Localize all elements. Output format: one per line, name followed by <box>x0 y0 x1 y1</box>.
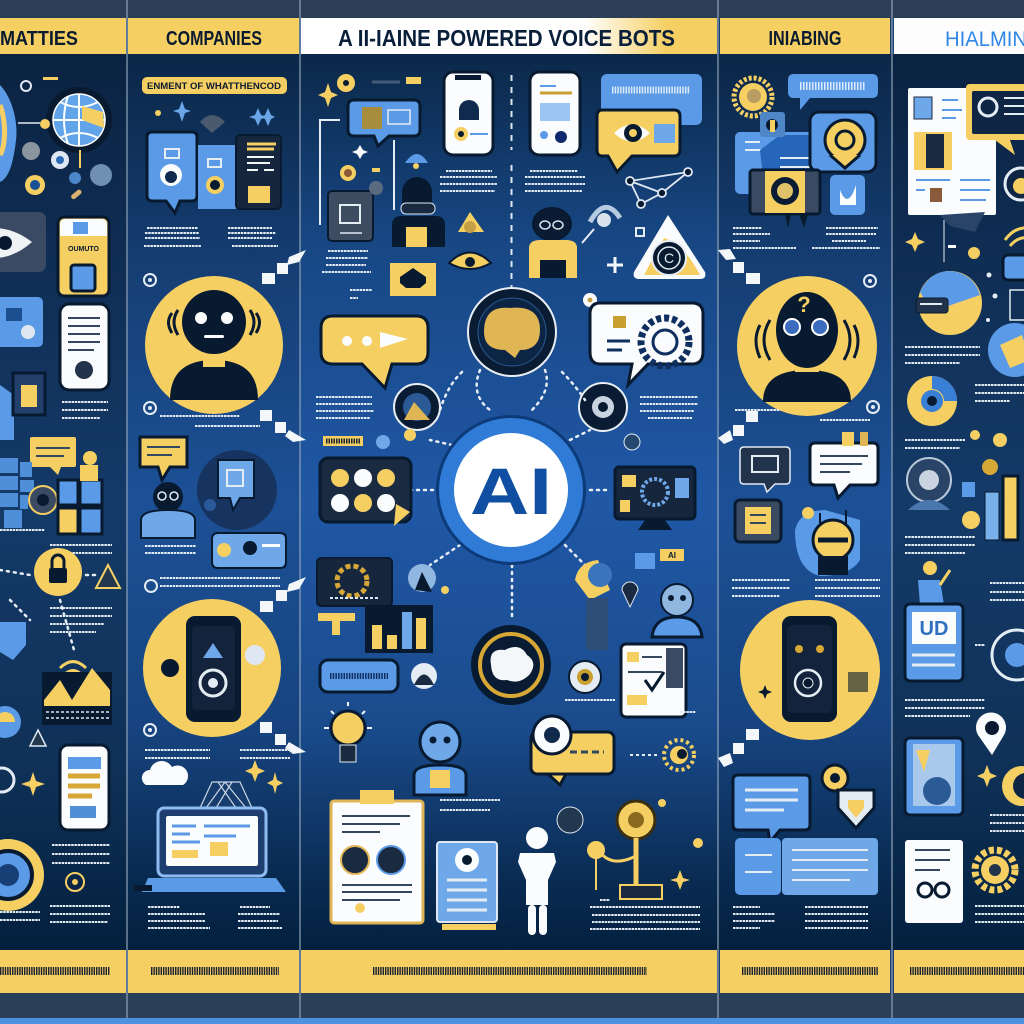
card: dark <box>328 181 383 241</box>
header: inviting <box>720 18 890 54</box>
robot: blue center <box>414 722 466 795</box>
top band <box>0 0 1024 18</box>
cluster: right upper: AI <box>668 551 676 560</box>
connector steps <box>718 411 758 444</box>
text block <box>145 750 290 758</box>
dotted radial links <box>405 370 610 620</box>
connector steps <box>260 410 306 442</box>
label pill <box>142 77 287 94</box>
icon: ring <box>145 580 157 592</box>
small icons cluster <box>18 77 112 200</box>
connector steps <box>260 722 306 754</box>
pill: blue label <box>320 660 398 692</box>
card: blue bubble <box>147 132 197 213</box>
clipboard <box>331 790 423 923</box>
core badge <box>471 625 551 705</box>
globe partial <box>988 323 1024 377</box>
text blocks <box>440 700 700 929</box>
icon: wifi speaker <box>1003 228 1024 280</box>
panel: chat blue <box>0 297 43 347</box>
panel: dark screen <box>615 434 695 530</box>
text blocks <box>733 228 880 248</box>
center column illustrations <box>316 72 705 935</box>
sparkle <box>21 772 45 796</box>
icon: sun gear <box>734 78 772 116</box>
icon: phone <box>444 72 493 155</box>
card: dark list <box>236 135 281 209</box>
icon: ring <box>1002 766 1024 806</box>
header: companies: COMPANIES <box>166 28 262 50</box>
document <box>908 88 996 215</box>
bottom dark band <box>0 993 1024 1019</box>
icon: bell <box>458 212 484 233</box>
phone badge <box>143 599 281 737</box>
chat pill <box>212 533 286 568</box>
header: companies <box>128 18 299 54</box>
icon: coin and pin <box>822 765 874 828</box>
icon: eye <box>449 252 491 269</box>
text blocks <box>440 171 585 191</box>
text block <box>990 815 1024 831</box>
cluster: right upper <box>575 549 684 650</box>
bubble: yellow location <box>531 716 614 785</box>
icon: wifi <box>60 662 86 674</box>
AI hub <box>436 415 586 565</box>
bracket <box>320 120 394 225</box>
icon: globe <box>46 87 112 153</box>
robot badge question <box>737 276 877 416</box>
icon: phone <box>530 72 580 155</box>
icon: plus <box>607 257 623 273</box>
icon: sun <box>630 740 694 770</box>
sparkles and coin <box>318 74 421 107</box>
icon: triangle badge <box>634 215 705 279</box>
card: speaker <box>750 170 820 228</box>
connector steps upper <box>262 250 306 284</box>
bubble: blue large <box>601 74 702 125</box>
panel: blue ring <box>810 112 876 172</box>
icon: shield <box>0 622 26 660</box>
column 1 illustrations <box>0 77 120 922</box>
text block <box>62 402 108 418</box>
robot ring <box>907 458 951 510</box>
text block <box>0 530 112 553</box>
chart: pie <box>916 271 982 335</box>
bubble: blue label <box>788 74 878 110</box>
icon: ring <box>569 661 601 693</box>
sparkles <box>245 760 283 794</box>
icon: gear <box>975 850 1015 890</box>
sparkles and wifi <box>155 101 275 133</box>
icon: ring <box>66 873 84 891</box>
icon: ring <box>867 401 879 413</box>
icon: ring <box>144 402 156 414</box>
icon: ring <box>1005 168 1024 200</box>
icon: phone <box>60 745 109 830</box>
card: blue: UD <box>920 618 948 640</box>
bubble: yellow <box>140 437 187 480</box>
header: main title: A II-IAINE POWERED VOICE BOTS <box>338 25 675 51</box>
card: yellow <box>58 217 109 296</box>
label pill: ENMENT OF WHATTHENCOD <box>147 81 282 91</box>
bar chart <box>962 459 1018 540</box>
text blocks <box>144 228 278 246</box>
column 4 illustrations <box>718 74 880 928</box>
bottom blue strip <box>0 1018 1024 1024</box>
robot small <box>141 482 195 538</box>
card: blue tall <box>905 738 963 815</box>
header: inviting: INIABING <box>768 28 842 50</box>
panel: dark chart <box>317 558 392 606</box>
card: yellow: OUMUTO <box>68 246 100 253</box>
text block <box>732 580 880 596</box>
brain badge <box>468 288 556 376</box>
bubble: yellow eye <box>597 110 680 172</box>
text blocks <box>148 907 282 928</box>
text block <box>905 537 975 553</box>
icon: ring <box>864 275 876 287</box>
text block <box>160 416 260 426</box>
bubble: yellow chat <box>321 316 428 388</box>
text blocks <box>905 645 985 716</box>
icon: cloud <box>142 761 188 785</box>
icon: head profile <box>0 85 16 182</box>
bubble: blue text <box>733 775 810 842</box>
icon: yellow square <box>0 373 45 440</box>
icon: ring <box>29 486 57 514</box>
header: left column: MATTIES <box>0 28 78 50</box>
connector steps <box>260 577 306 612</box>
icon: light bulb <box>324 702 372 762</box>
icon: left lens <box>394 384 440 430</box>
text block <box>975 906 1024 922</box>
icon: helmet <box>582 207 620 243</box>
icon: left blobs <box>0 706 46 792</box>
small dots <box>583 228 644 307</box>
column 5 illustrations <box>905 84 1024 923</box>
footer strips <box>0 950 1024 993</box>
figure: white person <box>518 827 556 935</box>
small sparkle icons <box>658 799 703 890</box>
lattice <box>200 782 252 808</box>
icon: lock badge <box>34 548 82 596</box>
text blocks <box>733 907 868 928</box>
text block <box>0 845 110 922</box>
bubble: white gear <box>590 303 703 385</box>
robot badge <box>145 276 283 414</box>
bubble: white <box>810 432 878 498</box>
laptop <box>134 808 286 892</box>
robot: hooded <box>392 177 445 247</box>
text blocks <box>145 546 280 586</box>
text block <box>735 410 870 420</box>
trophy <box>557 801 662 899</box>
network <box>626 168 692 208</box>
bubble: blue <box>348 100 420 146</box>
connector <box>940 212 985 262</box>
bubble: dark <box>740 447 790 492</box>
robot: yellow torso <box>529 208 577 278</box>
text blocks <box>322 251 372 298</box>
header: main title <box>301 18 717 54</box>
document <box>905 840 963 923</box>
card: yellow dark <box>735 500 781 542</box>
icon: ring <box>144 274 156 286</box>
sparkle <box>905 232 925 252</box>
small label <box>323 429 416 449</box>
dashed center line <box>510 75 512 300</box>
icon: gear <box>0 839 44 911</box>
icon: triangle badge: C <box>664 250 674 266</box>
icon: badge <box>408 564 449 594</box>
icon: eye panel <box>0 212 46 272</box>
card: checklist <box>621 644 686 717</box>
icon: phone <box>60 304 109 390</box>
header: left column <box>0 18 126 54</box>
sparkle <box>977 765 997 787</box>
small icons <box>340 145 428 181</box>
phone badge <box>740 600 880 740</box>
icon: yellow box <box>390 263 436 296</box>
text blocks <box>905 347 980 363</box>
chart: yellow mountains <box>42 668 112 725</box>
small icons <box>970 385 1024 447</box>
chart: donut <box>907 376 957 426</box>
bubble: yellow note <box>30 437 97 475</box>
robot: blue right <box>652 584 702 637</box>
icon: right lens <box>579 383 627 431</box>
icon: warning triangle <box>96 565 120 588</box>
card: yellow profile <box>966 84 1024 155</box>
panel: dark control <box>320 458 411 526</box>
robot: tall blue <box>437 842 497 930</box>
header: right column <box>894 18 1024 54</box>
small sparkles <box>986 272 1024 322</box>
column 2 illustrations <box>134 77 306 928</box>
text block <box>50 608 112 632</box>
bar chart <box>365 605 433 653</box>
robot badge question: ? <box>797 292 811 317</box>
icon: pin <box>411 663 437 689</box>
icon: ring <box>992 630 1024 680</box>
map tiles <box>0 458 34 528</box>
bee robot <box>795 507 860 576</box>
card: blue <box>905 604 963 681</box>
text block <box>905 440 965 448</box>
connector steps <box>718 729 759 767</box>
figure <box>918 561 950 605</box>
icon: white pin <box>976 713 1006 755</box>
panel: blue small <box>830 175 865 215</box>
dotted links <box>0 570 96 650</box>
text block <box>990 583 1024 600</box>
AI hub: AI <box>470 454 552 528</box>
bars <box>58 465 102 534</box>
card: blue back bubble <box>735 112 815 195</box>
puzzle circle <box>197 450 277 530</box>
card: blue <box>198 145 236 209</box>
text blocks <box>316 397 698 418</box>
icon: ring <box>144 724 156 736</box>
connector steps <box>718 249 760 284</box>
book <box>735 838 878 895</box>
connector shape <box>318 613 355 635</box>
